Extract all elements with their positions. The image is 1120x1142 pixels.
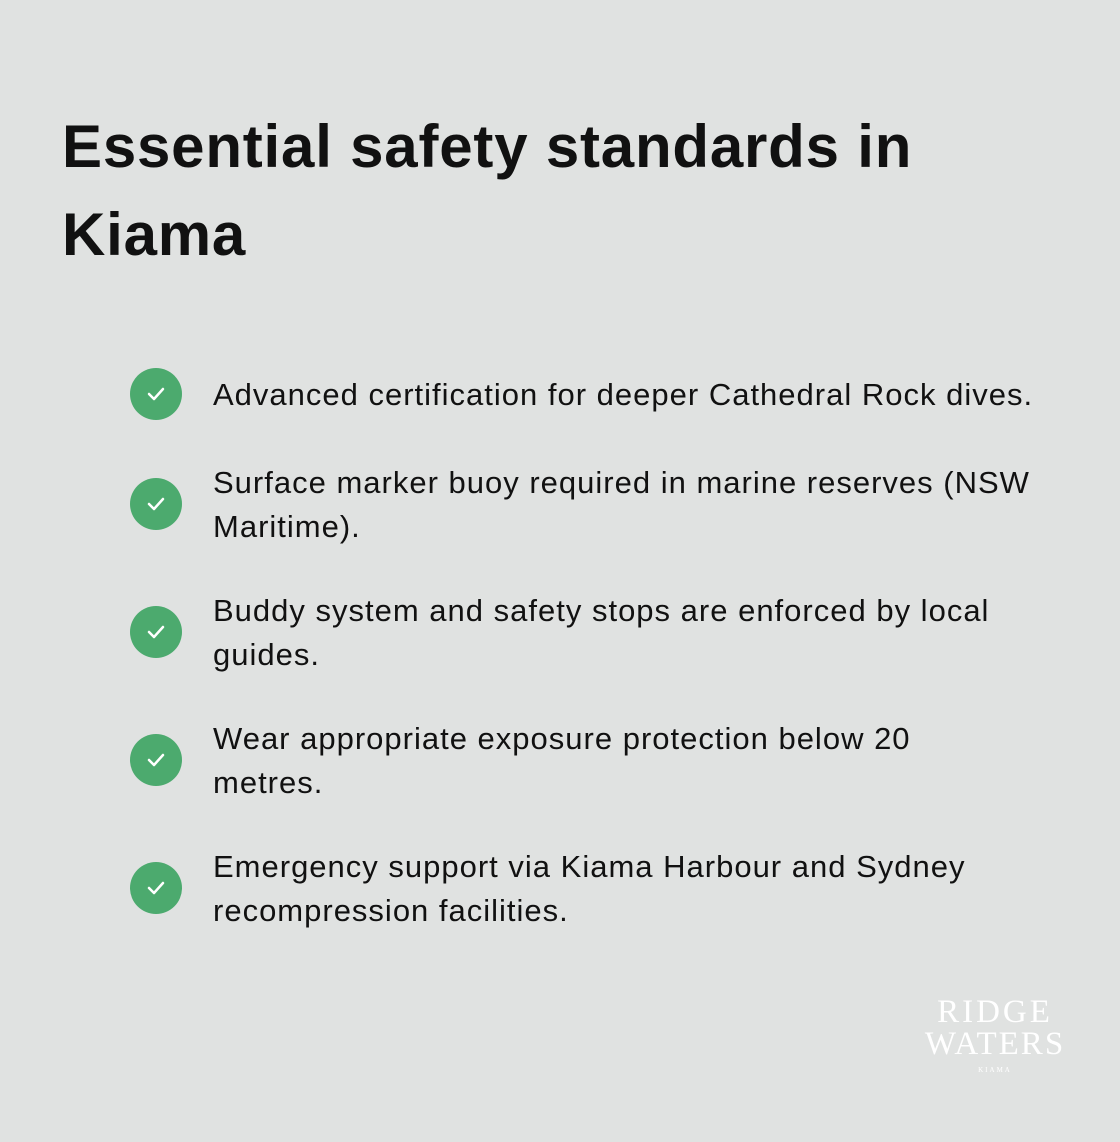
item 5 [130, 849, 965, 928]
item 4 [130, 721, 911, 800]
text: Maritime). [213, 509, 361, 544]
item 1 [130, 368, 1033, 420]
text [213, 721, 911, 800]
text: recompression facilities. [213, 893, 569, 928]
title [62, 113, 912, 268]
icon: check [130, 734, 182, 786]
icon: check [130, 478, 182, 530]
logo [925, 994, 1065, 1074]
text [213, 465, 1030, 544]
text: guides. [213, 637, 320, 672]
logo: WATERS [925, 1026, 1065, 1062]
text [213, 849, 965, 928]
icon: check [130, 368, 182, 420]
text: Surface marker buoy required in marine reserves (NSW [213, 465, 1030, 500]
logo: RIDGE [937, 994, 1053, 1030]
title: Kiama [62, 201, 246, 268]
text [213, 593, 989, 672]
item 3 [130, 593, 989, 672]
icon: check [130, 606, 182, 658]
text: metres. [213, 765, 323, 800]
text: Advanced certification for deeper Cathedral Rock dives. [213, 377, 1033, 412]
icon: check [130, 862, 182, 914]
text: Buddy system and safety stops are enforced by local [213, 593, 989, 628]
item 2 [130, 465, 1030, 544]
text: Wear appropriate exposure protection below 20 [213, 721, 911, 756]
logo: KIAMA [978, 1066, 1012, 1074]
title: Essential safety standards in [62, 113, 912, 180]
text: Emergency support via Kiama Harbour and Sydney [213, 849, 965, 884]
